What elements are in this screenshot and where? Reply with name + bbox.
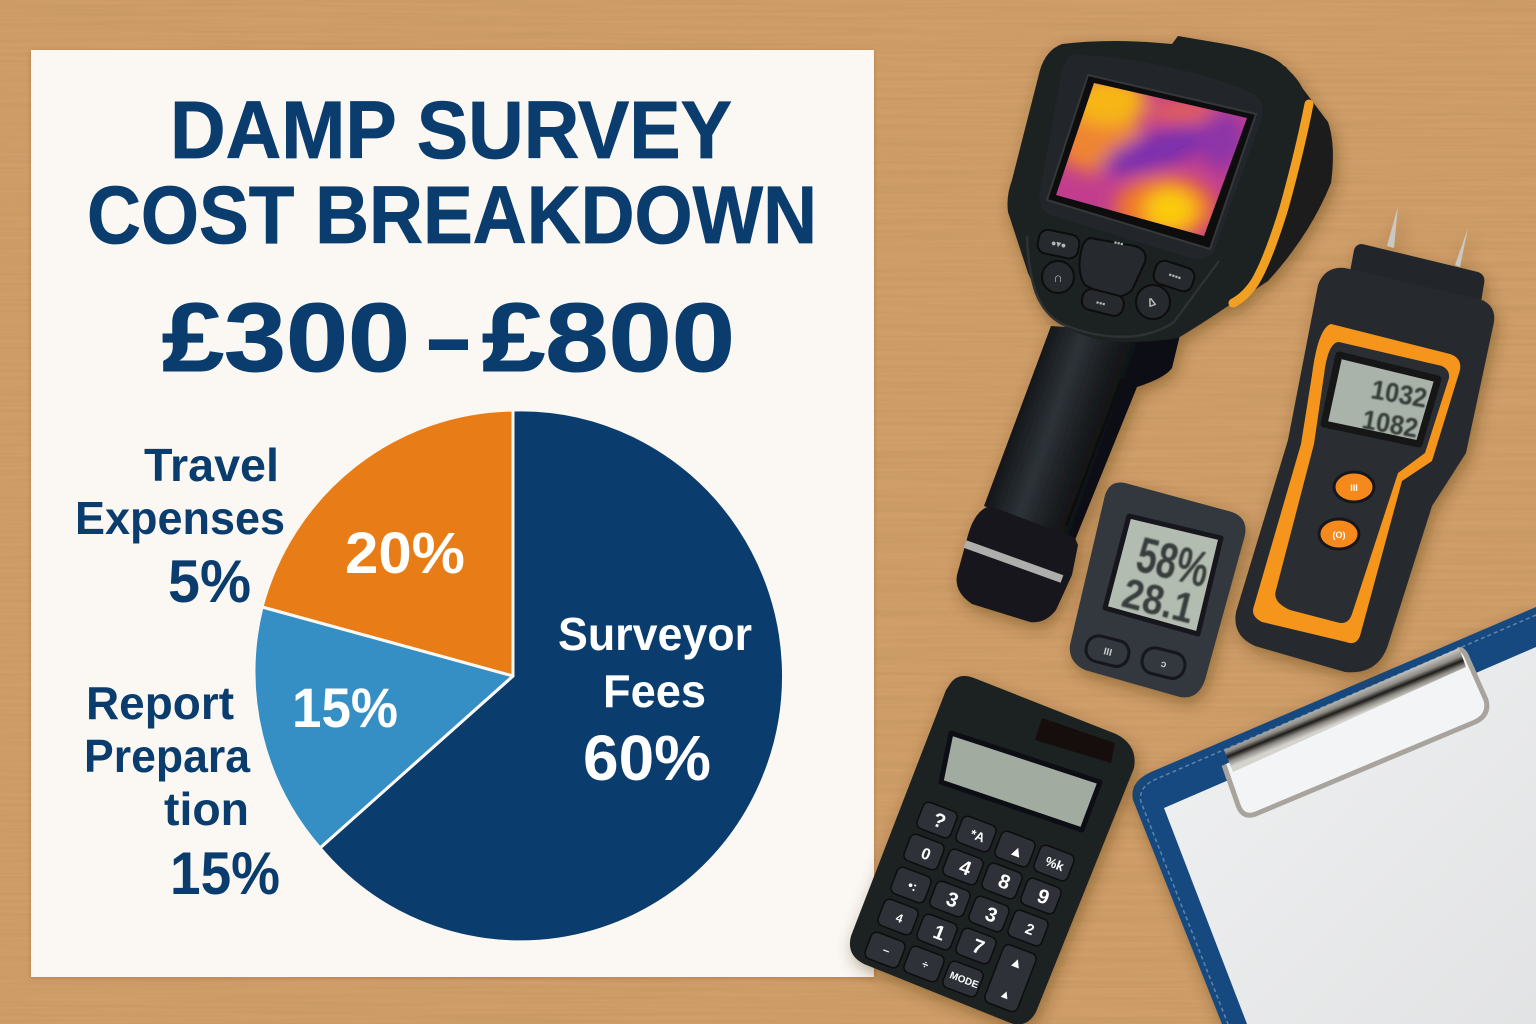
calculator keypad: 7 xyxy=(969,935,987,960)
meter button glyphs: (O) xyxy=(1332,530,1346,540)
meter orange buttons xyxy=(1319,472,1374,549)
meter lcd xyxy=(1324,355,1438,444)
meter orange trim xyxy=(1253,324,1460,643)
camera handle groove xyxy=(1066,379,1122,526)
hygrometer lcd xyxy=(1105,516,1221,634)
pie chart xyxy=(254,410,784,942)
label: travel expenses 5%: Travel xyxy=(144,439,279,491)
title xyxy=(87,85,817,261)
pie label: 15%: 15% xyxy=(292,676,398,739)
meter lcd reading: 1082 xyxy=(1360,404,1420,444)
calculator keypad: 9 xyxy=(1034,885,1052,910)
hygrometer button glyphs: ↄ xyxy=(1160,659,1168,671)
pie label: 20%: 20% xyxy=(345,521,465,586)
calculator keypad: ▲ xyxy=(1007,952,1026,972)
label: travel expenses 5%: 5% xyxy=(168,548,251,615)
hygrometer reading: 28.1 xyxy=(1118,569,1199,632)
camera button glyphs: ▪▪▪ xyxy=(1095,297,1107,309)
label: travel expenses 5% xyxy=(75,439,285,615)
calculator display xyxy=(941,733,1100,830)
slice: travel expenses xyxy=(262,410,513,676)
thermal image xyxy=(1056,83,1247,236)
camera orange band xyxy=(1233,104,1309,303)
title: COST BREAKDOWN xyxy=(87,170,817,261)
hygrometer button glyphs: III xyxy=(1102,646,1113,659)
calculator keypad: ▲ xyxy=(1007,841,1027,862)
camera body xyxy=(1008,36,1305,342)
title: DAMP SURVEY xyxy=(170,85,732,176)
price range: £300 xyxy=(162,283,410,392)
meter lcd reading: 1032 xyxy=(1369,374,1429,414)
hygrometer button glyphs xyxy=(1102,646,1168,671)
camera button glyphs: ●▾● xyxy=(1050,238,1067,251)
label: report preparation 15% xyxy=(84,677,280,907)
label: travel expenses 5%: Expenses xyxy=(75,492,285,544)
meter dark face xyxy=(1275,342,1449,623)
meter lcd reading xyxy=(1360,374,1429,444)
price range: £800 xyxy=(482,283,735,392)
price range xyxy=(162,283,735,392)
calculator keypad: %k xyxy=(1043,853,1067,874)
calculator xyxy=(850,676,1135,1024)
calculator keypad: 4 xyxy=(956,856,975,881)
camera keypad panel outline xyxy=(1027,236,1219,337)
calculator keypad: 2 xyxy=(1023,920,1037,939)
camera screen recess xyxy=(1039,54,1263,259)
clipboard xyxy=(1132,607,1536,1024)
calculator solar cell xyxy=(1035,718,1115,763)
meter body xyxy=(1235,268,1494,672)
label: report preparation 15%: Prepara xyxy=(84,730,250,782)
hygrometer reading: 58% xyxy=(1131,526,1215,598)
clipboard metal clip xyxy=(1224,648,1487,815)
calculator keypad: ÷ xyxy=(920,959,930,972)
calculator keypad: 3 xyxy=(943,888,961,913)
white report panel xyxy=(31,50,874,977)
hygrometer reading xyxy=(1118,526,1215,632)
calculator keypad: MODE xyxy=(948,970,980,991)
calculator keypad: 1 xyxy=(930,921,948,946)
pie label: surveyor fees 60%: Fees xyxy=(603,665,706,717)
calculator keypad xyxy=(863,800,1076,1013)
calculator keypad: 8 xyxy=(995,870,1013,895)
camera button glyphs: ▪▪▪▪ xyxy=(1167,269,1183,283)
hygrometer buttons xyxy=(1083,633,1187,681)
thermal imaging camera xyxy=(957,36,1333,622)
calculator keypad: 3 xyxy=(982,903,1000,928)
hygrometer xyxy=(1070,482,1245,697)
camera button glyphs: ∆ xyxy=(1146,294,1158,310)
pie label: surveyor fees 60%: Surveyor xyxy=(558,608,752,660)
slice: surveyor fees xyxy=(320,410,784,942)
camera handle xyxy=(984,326,1180,540)
calculator keypad: 0 xyxy=(918,845,933,864)
camera control buttons xyxy=(1036,228,1197,319)
meter prongs xyxy=(1387,206,1468,267)
hygrometer body xyxy=(1070,482,1245,697)
camera lens cap xyxy=(957,506,1078,622)
pie label: surveyor fees 60%: 60% xyxy=(583,722,711,794)
calculator keypad: 4 xyxy=(894,911,905,926)
label: report preparation 15%: Report xyxy=(86,677,234,729)
camera screen bezel xyxy=(1047,75,1256,249)
pie label: surveyor fees 60% xyxy=(558,608,752,794)
meter button glyphs: III xyxy=(1350,483,1358,493)
camera button glyphs: ▪▪▪ xyxy=(1113,237,1124,249)
camera button glyphs: ∩ xyxy=(1053,270,1063,285)
calculator keypad: *A xyxy=(968,826,988,846)
calculator keypad: •: xyxy=(906,877,919,894)
calculator keypad: ▲ xyxy=(997,986,1013,1003)
meter top cap xyxy=(1350,244,1484,302)
calculator body xyxy=(850,676,1135,1024)
clipboard stitching xyxy=(1141,615,1536,1024)
slice: report preparation xyxy=(254,607,513,848)
meter button glyphs xyxy=(1332,483,1358,540)
camera button glyphs xyxy=(1050,237,1183,310)
label: report preparation 15%: 15% xyxy=(170,840,280,907)
clipboard paper xyxy=(1164,647,1536,1024)
moisture meter xyxy=(1235,206,1494,672)
calculator keypad: ? xyxy=(930,809,949,834)
camera lens housing xyxy=(1200,66,1333,306)
calculator keypad: – xyxy=(881,943,892,958)
label: report preparation 15%: tion xyxy=(164,783,249,835)
clipboard blue backing xyxy=(1132,607,1536,1024)
camera silver ring xyxy=(965,544,1062,579)
price range: – xyxy=(427,283,470,392)
